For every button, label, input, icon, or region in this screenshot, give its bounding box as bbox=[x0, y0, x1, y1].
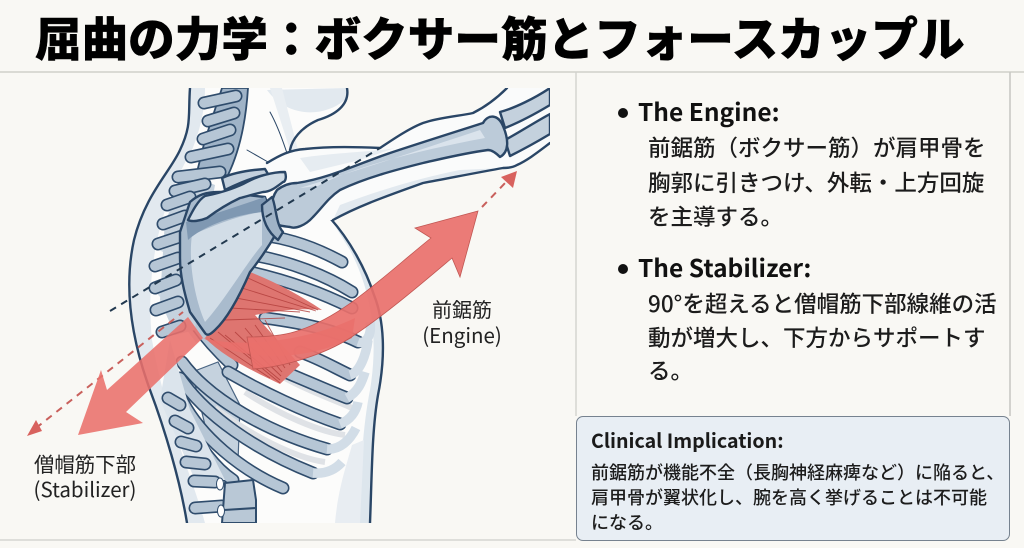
arm and shoulder bbox=[267, 88, 550, 228]
scapula bbox=[180, 169, 286, 335]
body outlines bbox=[129, 88, 190, 523]
label: stabilizer: 僧帽筋下部 bbox=[34, 448, 136, 478]
dashed force line: red lower bbox=[27, 312, 183, 436]
spine bbox=[155, 88, 256, 523]
label: engine: 前鋸筋 bbox=[432, 294, 492, 323]
callout: clinical implication bbox=[576, 416, 1010, 541]
forearm bones bbox=[500, 88, 550, 128]
label: stabilizer bbox=[34, 448, 136, 503]
body: the stabilizer: 90°を超えると僧帽筋下部線維の活 bbox=[648, 287, 997, 319]
humerus bbox=[272, 117, 507, 228]
anatomy: torso, ribs, spine bbox=[129, 88, 383, 523]
title: 屈曲の力学：ボクサー筋とフォースカップル bbox=[35, 3, 965, 70]
body: the engine: 胸郭に引きつけ、外転・上方回旋 bbox=[648, 166, 984, 198]
callout heading: Clinical Implication: bbox=[591, 425, 784, 454]
text block: the stabilizer bbox=[618, 264, 628, 274]
arrow: stabilizer, lower left bbox=[78, 317, 355, 435]
body: the stabilizer: る。 bbox=[648, 354, 693, 386]
callout body bbox=[591, 459, 1004, 535]
label: engine: (Engine) bbox=[422, 319, 502, 349]
rib shadows bbox=[215, 378, 352, 462]
body: the engine: 前鋸筋（ボクサー筋）が肩甲骨を bbox=[648, 131, 986, 163]
body: the stabilizer bbox=[648, 287, 997, 386]
body: the engine bbox=[648, 131, 986, 232]
label: engine bbox=[422, 294, 502, 349]
body: the engine: を主導する。 bbox=[648, 200, 783, 232]
dashed force line: red upper bbox=[482, 171, 517, 207]
heading: the engine: The Engine: bbox=[638, 94, 780, 129]
torso silhouette bbox=[129, 88, 383, 523]
bullet bbox=[618, 108, 628, 118]
heading: the stabilizer: The Stabilizer: bbox=[638, 250, 811, 285]
callout body: 肩甲骨が翼状化し、腕を高く挙げることは不可能 bbox=[591, 484, 987, 510]
back ribs bbox=[168, 211, 170, 212]
text block: the engine bbox=[618, 108, 628, 118]
skin shading bbox=[129, 88, 205, 523]
label: stabilizer: (Stabilizer) bbox=[34, 473, 136, 503]
callout body: になる。 bbox=[591, 509, 663, 535]
inner structures behind ribs bbox=[192, 362, 240, 462]
callout body: 前鋸筋が機能不全（長胸神経麻痺など）に陥ると、 bbox=[591, 459, 1004, 485]
body: the stabilizer: 動が増大し、下方からサポートす bbox=[648, 320, 986, 352]
bullet bbox=[618, 264, 628, 274]
dashed force line: black bbox=[110, 148, 380, 311]
upper arm skin bbox=[286, 154, 332, 220]
arrow: engine, upper right bbox=[247, 211, 478, 369]
muscle: serratus anterior bbox=[205, 272, 322, 384]
ribs bbox=[160, 205, 370, 488]
